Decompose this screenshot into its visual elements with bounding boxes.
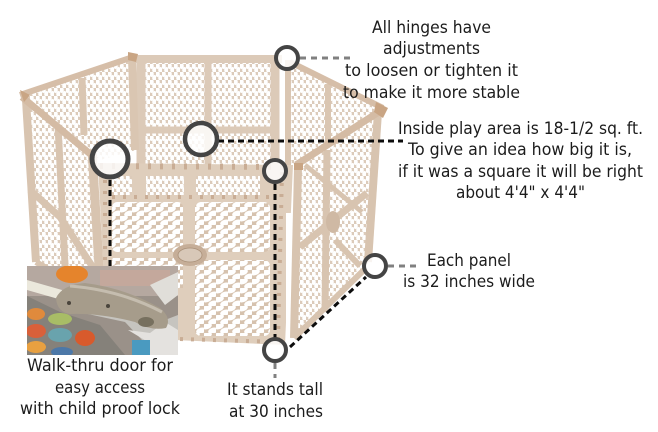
back panel: [136, 57, 282, 202]
callout: panel width: is 32 inches wide: [403, 272, 535, 291]
callout: height: It stands tall: [227, 380, 323, 399]
callout: door: Walk-thru door for: [27, 356, 173, 375]
playpen fence: [20, 52, 388, 345]
callout: panel width: [403, 251, 535, 291]
callout: hinges: adjustments: [383, 39, 480, 58]
logo badge: [173, 244, 207, 266]
dashed leader lines: [110, 58, 420, 378]
callout: height: at 30 inches: [229, 402, 323, 421]
callout: play area: if it was a square it will be right: [398, 162, 643, 181]
callout: door: [20, 356, 180, 418]
back-left panel: [20, 57, 136, 160]
callout: door: easy access: [55, 378, 145, 397]
callout: play area: To give an idea how big it is,: [407, 140, 632, 159]
left panel: [22, 97, 104, 300]
callout: height: [227, 380, 323, 421]
callout: play area: Inside play area is 18-1/2 sq. ft.: [398, 119, 643, 138]
callout: hinges: All hinges have: [372, 18, 491, 37]
callout: door: with child proof lock: [20, 399, 180, 418]
highlight circles: [92, 47, 386, 361]
front panel: [98, 163, 293, 345]
right panel: [286, 102, 388, 338]
callout: hinges: to make it more stable: [343, 83, 520, 102]
callout: play area: about 4'4" x 4'4": [456, 183, 585, 202]
callout: panel width: Each panel: [427, 251, 511, 270]
callout: play area: [398, 119, 643, 202]
inset photo: door lock: [26, 265, 178, 357]
callout: hinges: [343, 18, 520, 102]
back-right panel: [288, 60, 383, 170]
callout: hinges: to loosen or tighten it: [345, 61, 519, 80]
